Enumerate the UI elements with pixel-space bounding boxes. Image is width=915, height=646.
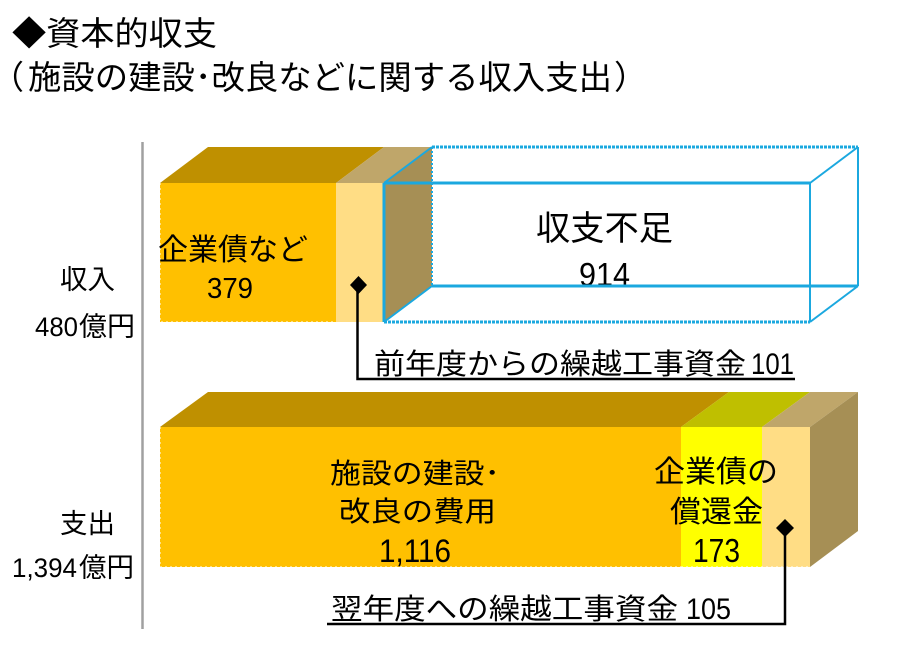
segment: corporate bonds 379 (160, 147, 384, 322)
callout: carryover from previous year: 前年度からの繰越工事資金 (374, 348, 746, 381)
label: shortfall (536, 210, 673, 293)
label: bond redemption: 173 (693, 532, 740, 569)
income label: 収入 (60, 265, 115, 295)
income label: 480 (35, 312, 78, 342)
label: bond redemption: 償還金 (670, 496, 763, 529)
title (0, 15, 647, 96)
expenditure label: 支出 (60, 509, 115, 539)
callout: carryover to next year: 翌年度への繰越工事資金 (331, 593, 678, 626)
income label (35, 265, 135, 342)
leader line (358, 290, 795, 379)
income label: 億円 (79, 312, 135, 342)
subheading: ） (614, 59, 647, 96)
segment: carryover 105 (681, 392, 858, 567)
label: corporate bonds: 企業債など (158, 234, 308, 267)
callout: carryover to next year: 105 (686, 593, 731, 626)
segment: carryover 101 (336, 147, 432, 322)
label: corporate bonds: 379 (207, 273, 253, 305)
expenditure label: 億円 (79, 553, 134, 583)
label: shortfall: 収支不足 (536, 210, 673, 248)
shortfall wireframe box (384, 147, 858, 322)
label: bond redemption (654, 456, 778, 569)
callout: carryover from previous year: 101 (751, 348, 794, 381)
label: bond redemption: 企業債の (654, 456, 778, 489)
marker diamond (776, 519, 794, 537)
label: construction cost: 1,116 (379, 533, 451, 569)
callout: carryover from previous year (350, 276, 795, 381)
vertical axis line (141, 142, 144, 629)
callout: carryover to next year (327, 519, 794, 626)
subheading: 施設の建設･改良などに関する収入支出 (28, 59, 612, 96)
label: construction cost: 改良の費用 (339, 496, 496, 527)
label: construction cost (330, 458, 500, 569)
label: shortfall: 914 (579, 256, 630, 293)
income 3D bar (158, 147, 432, 322)
segment: bond redemption 173 (681, 392, 810, 567)
label: corporate bonds (158, 234, 308, 305)
segment: construction cost 1,116 (160, 392, 729, 567)
expenditure label: 1,394 (12, 553, 77, 583)
expenditure 3D bar (160, 392, 858, 569)
marker diamond (350, 276, 367, 294)
heading: capital balance: ◆資本的収支 (12, 15, 217, 52)
leader line (327, 531, 785, 624)
expenditure label (12, 509, 134, 583)
label: construction cost: 施設の建設･ (330, 458, 500, 489)
